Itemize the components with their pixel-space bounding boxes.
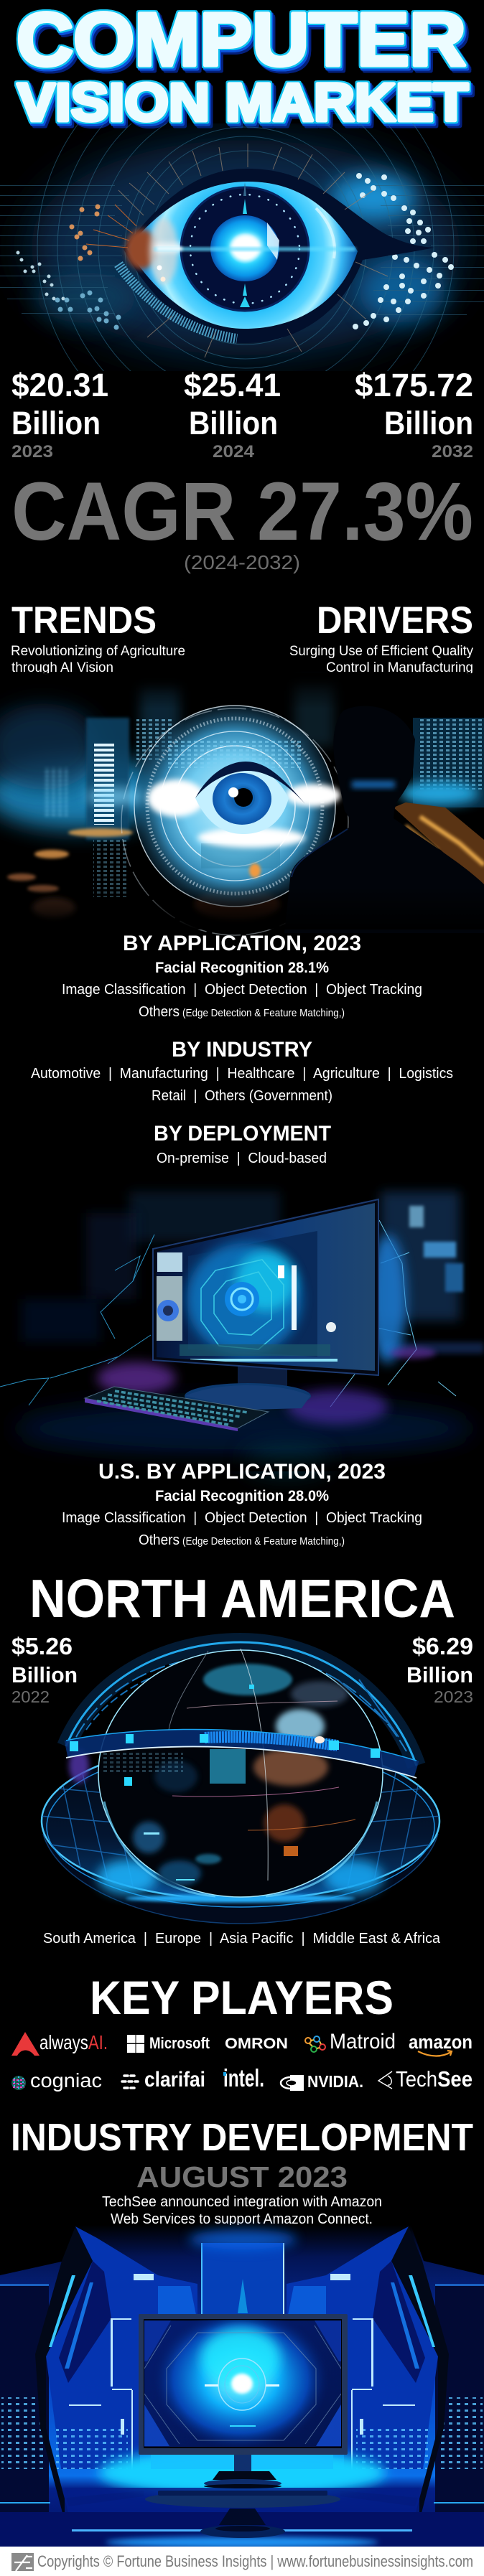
industry development text [102,2194,382,2227]
stat: North America 2022: Billion [11,1662,78,1687]
title: COMPUTER [17,0,466,82]
stat: North America 2022: $5.26 [11,1633,73,1659]
HUD rings [134,706,335,907]
stat: 2023 market size: 2023 [11,442,53,462]
eye [195,767,289,834]
illustration: holographic globe [39,1642,442,1924]
iris [181,187,309,311]
eyelid [124,169,434,343]
U.S. by application heading and list: (Edge Detection & Feature Matching,) [182,1536,345,1547]
by application heading and list: BY APPLICATION, 2023 [123,932,361,955]
stat: 2032 market size: $175.72 [355,367,473,403]
drivers block: DRIVERS [317,599,473,642]
by deployment heading and list [154,1122,331,1166]
other regions list: South America | Europe | Asia Pacific | Middle East & Africa [43,1931,441,1947]
by industry heading and list: Automotive | Manufacturing | Healthcare | Agriculture | Logistics [31,1066,453,1082]
drivers block [289,599,473,675]
sclera [127,182,358,329]
logo: alwaysAI: alwaysAI. [39,2031,108,2053]
stat: 2023 market size [11,367,108,462]
U.S. by application heading and list [62,1460,422,1548]
region heading: NORTH AMERICA [29,1568,455,1629]
by industry heading and list: Retail | Others (Government) [152,1088,332,1104]
city background [0,682,334,920]
floor glow [98,2448,386,2497]
flares [147,779,205,817]
keyboard [85,1387,269,1428]
logo: amazon: amazon [409,2031,473,2053]
by industry heading and list: BY INDUSTRY [172,1038,312,1062]
stat: 2023 market size: $20.31 [11,367,108,403]
drivers block: Surging Use of Efficient Quality [289,644,473,659]
dim data-centre background [14,1191,484,1475]
monitor frame [139,2308,348,2455]
lower lid texture [118,264,237,339]
illustration: computer monitor and keyboard [0,1191,484,1475]
stat: 2024 market size: Billion [189,405,278,441]
logo: alwaysAI [11,2031,108,2056]
drivers block: Control in Manufacturing [326,660,473,675]
stat: 2032 market size: 2032 [432,442,473,462]
lashes [118,144,388,357]
logo: clarifai [122,2068,205,2092]
energy lines [0,1220,456,1407]
continents [101,1664,348,1886]
by application heading and list: Image Classification | Object Detection | Object Tracking [62,982,422,998]
CAGR figure: (2024-2032) [184,551,300,573]
trends block: through AI Vision [11,660,113,675]
silhouette [284,706,484,933]
stat: 2024 market size: 2024 [213,442,255,462]
U.S. by application heading and list: Others [139,1532,180,1548]
industry development text: Web Services to support Amazon Connect. [111,2211,373,2227]
illustration: eye over city with silhouette [0,673,484,935]
logo: TechSee: TechSee [396,2066,473,2092]
central shaft [189,2229,297,2315]
U.S. by application heading and list: Image Classification | Object Detection | Object Tracking [62,1510,422,1526]
stat: North America 2023 [406,1633,473,1706]
stat: 2024 market size [184,367,281,462]
stat: 2024 market size: $25.41 [184,367,281,403]
by deployment heading and list: On-premise | Cloud-based [157,1151,327,1166]
trends block: TRENDS [11,599,157,642]
orbital band [66,1738,416,1769]
logo: Microsoft: Microsoft [149,2034,210,2052]
footer logo [11,2553,34,2571]
globe sphere [98,1650,383,1897]
U.S. by application heading and list: Facial Recognition 28.0% [155,1488,329,1504]
illustration: glowing digital eye [0,123,484,371]
stat: North America 2023: 2023 [434,1687,473,1706]
top black corners [0,2225,75,2275]
outer dome [66,1642,416,1766]
monitor stand [204,2455,281,2488]
stat: 2023 market size: Billion [11,405,101,441]
right side city through silhouette [394,718,484,884]
key players heading: KEY PLAYERS [90,1971,394,2024]
stat: North America 2023: Billion [406,1662,473,1687]
side buildings and frames [0,2226,197,2547]
logo: Matroid: Matroid [330,2030,396,2053]
U.S. by application heading and list: U.S. BY APPLICATION, 2023 [98,1460,386,1484]
footer bar [0,2547,484,2576]
logo: NVIDIA: NVIDIA. [307,2072,363,2091]
stat: 2032 market size: Billion [384,405,473,441]
by industry heading and list [31,1038,453,1104]
by deployment heading and list: BY DEPLOYMENT [154,1122,331,1146]
monitor [153,1199,378,1375]
title: VISION MARKET [17,72,468,132]
industry development text: TechSee announced integration with Amazon [102,2194,382,2210]
illustration: futuristic monitor room [0,2225,484,2548]
logo: intel: intel. [223,2065,264,2092]
logo: cogniac: cogniac [30,2069,102,2092]
stat: North America 2023: $6.29 [412,1633,473,1659]
title [17,0,468,132]
lower bowl [43,1834,438,1924]
round table and pedestal [145,2491,340,2538]
logo: clarifai: clarifai [144,2068,205,2092]
logo: Matroid [305,2030,396,2053]
trends block [11,599,185,675]
by application heading and list [62,932,422,1020]
logo: OMRON: OMRON [225,2036,288,2052]
logo: Microsoft [127,2034,210,2053]
logo: NVIDIA [281,2072,363,2091]
particle dots [355,176,451,327]
by application heading and list: Facial Recognition 28.1% [155,960,329,976]
stat: 2032 market size [355,367,473,462]
trends block: Revolutionizing of Agriculture [11,644,185,659]
industry development date: AUGUST 2023 [136,2160,348,2193]
by application heading and list: (Edge Detection & Feature Matching,) [182,1008,345,1019]
desk stand and base [238,1365,287,1387]
logos grid [11,2030,473,2092]
monitor screen content [144,2320,341,2448]
stat: North America 2022 [11,1633,78,1706]
by application heading and list: Others [139,1004,180,1020]
stat: North America 2022: 2022 [11,1687,50,1706]
